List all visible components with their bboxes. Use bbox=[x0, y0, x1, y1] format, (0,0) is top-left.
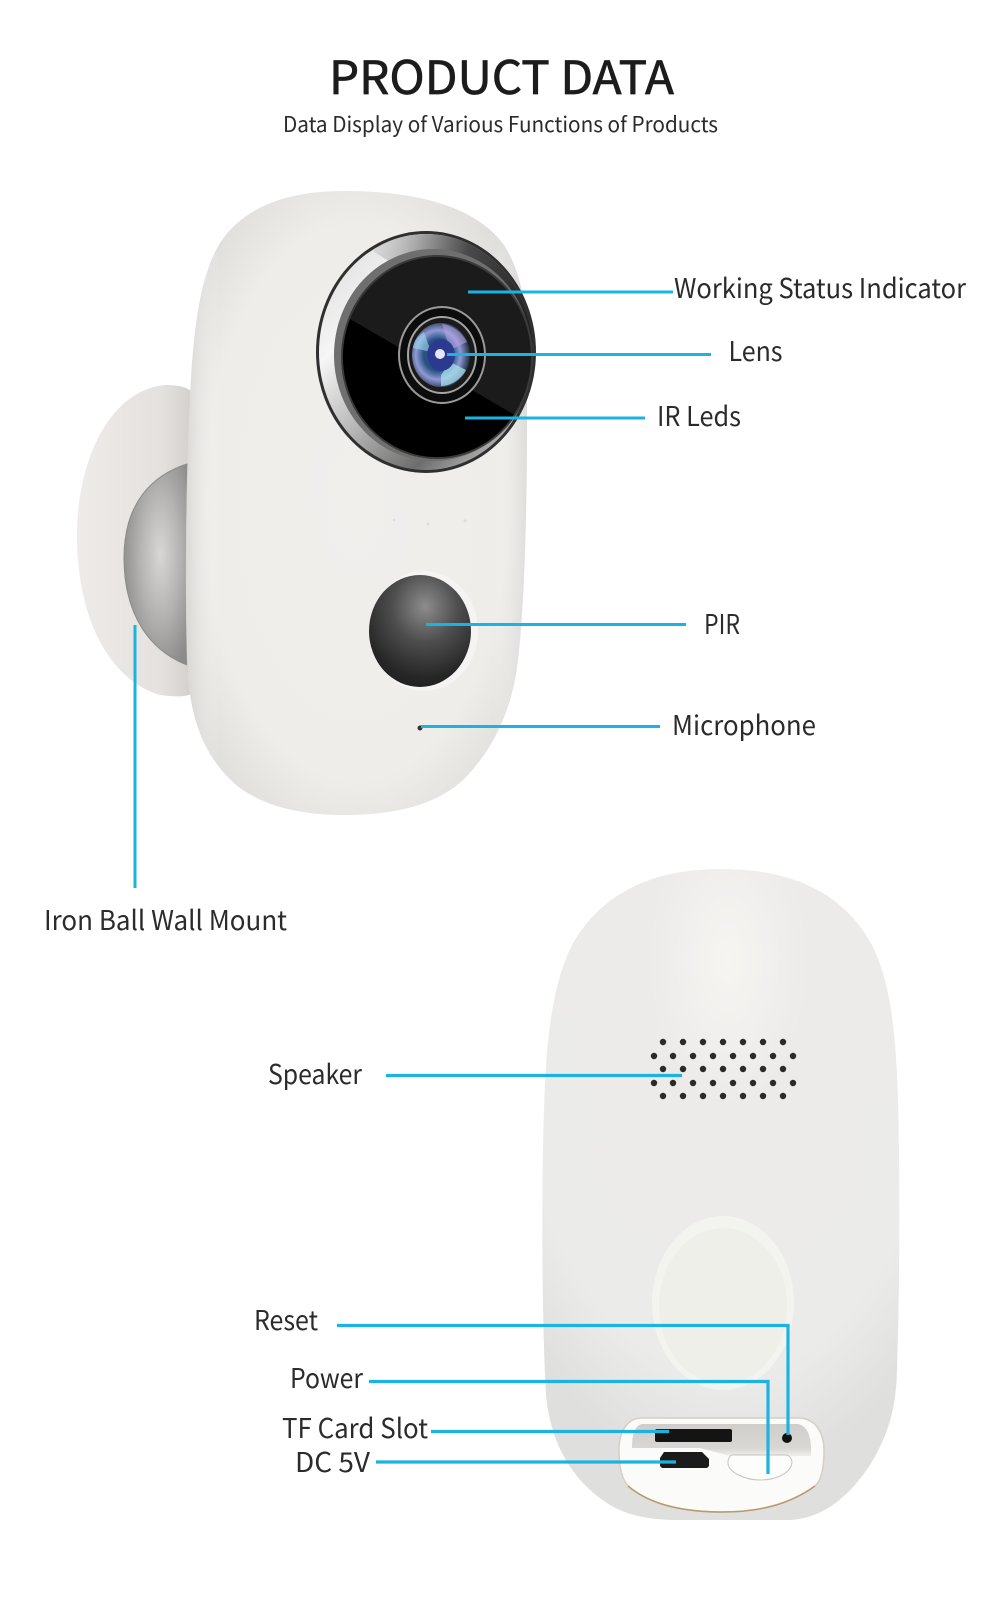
callout: Reset bbox=[254, 1299, 788, 1435]
subtitle: Data Display of Various Functions of Products bbox=[283, 108, 718, 139]
micro USB port bbox=[660, 1452, 709, 1468]
callout: PIR: PIR bbox=[704, 603, 740, 642]
bay lower rim bbox=[628, 1486, 815, 1512]
front camera photo bbox=[77, 191, 545, 815]
reset hole bbox=[782, 1433, 792, 1443]
callout: Iron Ball Wall Mount: Iron Ball Wall Mount bbox=[44, 899, 287, 938]
callout: Lens: Lens bbox=[728, 330, 782, 369]
microphone hole bbox=[418, 726, 422, 730]
wall mount disc bbox=[77, 385, 198, 696]
speaker grille bbox=[651, 1039, 796, 1099]
black glass panel bbox=[343, 257, 531, 457]
iron ball bbox=[124, 463, 190, 666]
lens bezel bbox=[316, 230, 545, 473]
lens barrel bbox=[399, 307, 485, 403]
rear camera photo bbox=[542, 869, 899, 1520]
power button bbox=[728, 1455, 792, 1480]
callout: Reset: Reset bbox=[254, 1299, 318, 1338]
TF card slot bbox=[655, 1429, 732, 1442]
callout: Working Status Indicator: Working Status Indicator bbox=[674, 267, 966, 306]
callout: IR Leds: IR Leds bbox=[657, 395, 741, 434]
callout: Speaker: Speaker bbox=[268, 1053, 362, 1092]
callout: DC 5V: DC 5V bbox=[295, 1441, 370, 1480]
callout: Power bbox=[290, 1357, 768, 1474]
mount socket bbox=[652, 1216, 794, 1390]
callout: Power: Power bbox=[290, 1357, 363, 1396]
rear body bbox=[542, 869, 899, 1520]
body edge shading bbox=[186, 191, 527, 815]
title: PRODUCT DATA bbox=[329, 42, 674, 108]
port bay bbox=[619, 1418, 824, 1512]
PIR sensor bbox=[369, 571, 478, 691]
indicator specks bbox=[392, 518, 466, 526]
callout: TF Card Slot: TF Card Slot bbox=[282, 1407, 428, 1446]
camera body bbox=[186, 191, 527, 815]
callout: Microphone: Microphone bbox=[672, 704, 816, 743]
